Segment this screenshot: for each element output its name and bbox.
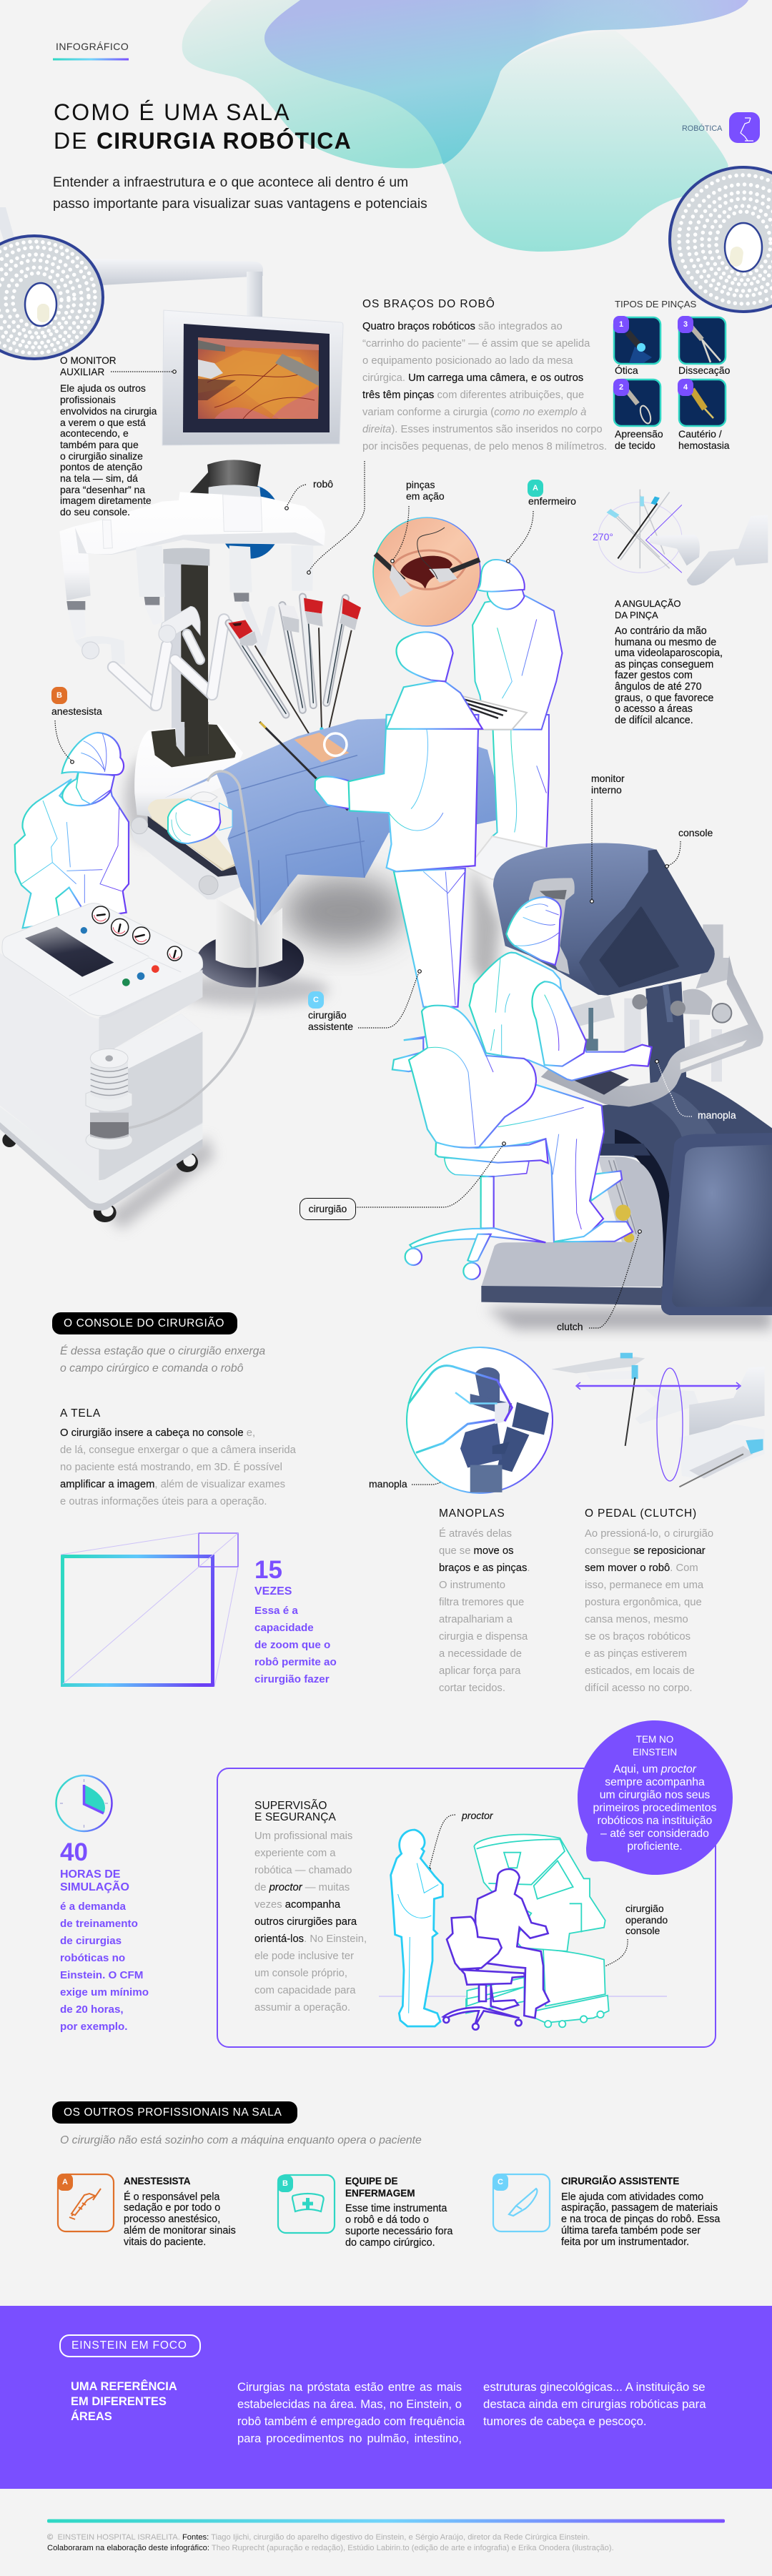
body: pedal: isso, permanece em uma [585, 1580, 703, 1591]
section pill: console [52, 1312, 237, 1334]
label: assistant surgeon: cirurgião [308, 1009, 347, 1021]
body: pedal: sem mover o robô. Com [585, 1562, 698, 1574]
card text: nursing team: do campo cirúrgico. [345, 2237, 435, 2249]
body: monitor: profissionais [60, 394, 116, 405]
body: angulation [615, 625, 723, 726]
body: screen: amplificar a imagem, além de visualizar exames [60, 1479, 285, 1490]
label: nurse: enfermeiro [528, 495, 576, 507]
label: pincers in action: pinças [406, 479, 435, 490]
badge 4: 4 [683, 383, 688, 392]
body: robot arms: o equipamento posicionado ao lado da mesa [362, 355, 573, 367]
body: supervision: outros cirurgiões para [254, 1916, 357, 1928]
body: handles: a necessidade de [439, 1648, 522, 1660]
label: proctor: proctor [462, 1810, 493, 1821]
badge 2: 2 [619, 383, 623, 392]
robot patient cart [59, 460, 361, 759]
body: monitor: envolvidos na cirurgia [60, 405, 157, 417]
assistant surgeon figure [315, 632, 482, 1071]
callout bubble [578, 1720, 733, 1875]
label: operating surgeon: cirurgião [625, 1903, 664, 1914]
unit: SIMULAÇÃO [60, 1881, 129, 1893]
card text: nursing team [345, 2176, 453, 2249]
pedal and arm movement illustration [551, 1353, 765, 1487]
heading: pincer types: TIPOS DE PINÇAS [615, 299, 696, 309]
heading: angulation: A ANGULAÇÃO [615, 598, 681, 609]
subtitle: Entender a infraestrutura e o que acontece ali dentro é um [53, 175, 408, 190]
heading: monitor: O MONITOR [60, 355, 117, 366]
body: screen: O cirurgião insere a cabeça no console e, [60, 1427, 255, 1439]
callout body: sempre acompanha [605, 1776, 705, 1788]
label: operating surgeon: operando [625, 1914, 668, 1926]
focus heading: UMA REFERÊNCIA [71, 2380, 177, 2393]
instrument tiles [614, 317, 726, 426]
badge: card B [277, 2175, 293, 2192]
purple footer band [0, 2306, 772, 2489]
body: angulation: ângulos de até 270 [615, 681, 702, 693]
badge A [528, 480, 543, 497]
badge 1: 1 [619, 320, 623, 329]
card text: assistant surgeon [561, 2175, 721, 2248]
body: pedal: postura ergonômica, que [585, 1597, 702, 1608]
body: robot arms: três têm pinças com diferentes atribuições, que [362, 390, 584, 401]
card text: anesthetist: além de monitorar sinais [124, 2225, 236, 2236]
seated surgeon figure [405, 897, 652, 1279]
stat text: de zoom que o [254, 1639, 330, 1651]
focus text column 1: estabelecidas na área. Mas, no Einstein, o [237, 2397, 462, 2411]
subtitle: passo importante para visualizar suas vantagens e potenciais [53, 197, 427, 212]
stat text: é a demanda [60, 1901, 126, 1913]
clock icon [56, 1775, 112, 1831]
zoom frame [61, 1533, 238, 1687]
body: handles [439, 1527, 530, 1694]
card heading: ANESTESISTA [124, 2176, 191, 2186]
pincer label 4 [678, 428, 730, 451]
body: supervision: experiente com a [254, 1848, 336, 1859]
focus heading [71, 2379, 177, 2423]
label: robot: robô [313, 478, 333, 490]
body: monitor: acontecendo, e [60, 427, 129, 439]
footer bar [47, 2519, 725, 2523]
body: handles: É através delas [439, 1528, 512, 1540]
supervision line art [391, 1830, 609, 2030]
callout body: um cirurgião nos seus [600, 1789, 710, 1801]
body: handles: aplicar força para [439, 1665, 520, 1677]
card text: anesthetist: processo anestésico, [124, 2214, 220, 2225]
section pill: console: O CONSOLE DO CIRURGIÃO [64, 1317, 224, 1329]
body: monitor: pontos de atenção [60, 461, 142, 472]
heading: angulation [615, 598, 681, 620]
background blobs [182, 0, 748, 252]
badge: card A [57, 2174, 73, 2191]
heading: screen: A TELA [60, 1407, 101, 1420]
angulation illustration [598, 490, 768, 585]
card heading: CIRURGIÃO ASSISTENTE [561, 2176, 679, 2186]
body: monitor: a verem o que está [60, 417, 146, 428]
body: supervision: com capacidade para [254, 1985, 355, 1996]
body: robot arms [362, 321, 607, 452]
callout body [593, 1763, 716, 1853]
heading: angulation: DA PINÇA [615, 610, 658, 620]
label: pincers in action [406, 479, 445, 502]
pincer label 2: de tecido [615, 440, 655, 451]
body: pedal: consegue se reposicionar [585, 1545, 706, 1557]
body: robot arms: Quatro braços robóticos são integrados ao [362, 321, 563, 332]
badge B: B [56, 691, 62, 700]
body: monitor: para “desenhar” na [60, 484, 145, 495]
callout body: proficiente. [627, 1841, 683, 1853]
stat text: de treinamento [60, 1918, 138, 1930]
pincer label 4: Cautério / [678, 428, 722, 440]
focus pill outline [60, 2335, 200, 2357]
anesthesia machine [0, 903, 203, 1222]
focus heading: EM DIFERENTES [71, 2395, 167, 2408]
label: console: console [678, 827, 713, 838]
focus text column 2 [483, 2380, 706, 2428]
stat: 15 times [254, 1556, 337, 1685]
focus heading: ÁREAS [71, 2410, 112, 2423]
label: operating surgeon: console [625, 1925, 660, 1936]
credits [47, 2533, 614, 2552]
card heading: ENFERMAGEM [345, 2188, 415, 2199]
subtitle [53, 175, 427, 212]
callout body: primeiros procedimentos [593, 1802, 716, 1814]
card text: assistant surgeon: aspiração, passagem de materiais [561, 2202, 718, 2214]
callout title: TEM NO [636, 1734, 673, 1745]
section pill: other professionals [52, 2101, 297, 2124]
body: screen [60, 1427, 296, 1507]
floor shadows [107, 758, 772, 1329]
intro: console: o campo cirúrgico e comanda o robô [60, 1362, 243, 1374]
section pill: other professionals: OS OUTROS PROFISSIONAIS NA SALA [64, 2106, 282, 2119]
stat text: capacidade [254, 1622, 314, 1634]
title: COMO É UMA SALA [54, 99, 291, 125]
leader end rings [71, 370, 668, 1985]
badge C: C [313, 996, 319, 1004]
focus text column 1 [237, 2380, 465, 2445]
stat text: de 20 horas, [60, 2003, 124, 2016]
stat text: de cirurgias [60, 1935, 122, 1947]
body: pedal: difícil acesso no corpo. [585, 1683, 693, 1694]
card heading: EQUIPE DE [345, 2176, 398, 2186]
header tag: INFOGRÁFICO [56, 41, 129, 52]
body: handles: filtra tremores que [439, 1597, 524, 1608]
label: handle: manopla [698, 1109, 736, 1121]
surgeon console [481, 843, 772, 1315]
label: clutch: clutch [557, 1321, 583, 1332]
label: operating surgeon [625, 1903, 668, 1936]
label: assistant surgeon: assistente [308, 1021, 353, 1032]
number 40: 40 [60, 1838, 88, 1866]
callout title: EINSTEIN [633, 1747, 677, 1758]
body: pedal: esticados, em locais de [585, 1665, 695, 1677]
pincer label 4: hemostasia [678, 440, 730, 451]
body: monitor: na tela — sim, dá [60, 472, 138, 484]
body: angulation: de difícil alcance. [615, 715, 693, 726]
focus text column 2: tumores de cabeça e pescoço. [483, 2414, 647, 2428]
supervision panel frame [217, 1768, 716, 2047]
leader lines [55, 372, 692, 1982]
badge 3 [678, 316, 693, 333]
header underline [53, 59, 129, 60]
pincer label 2: Apreensão [615, 428, 663, 440]
body: pedal: e as pinças estiverem [585, 1648, 687, 1660]
manopla circle [407, 1347, 553, 1493]
intro: other professionals: O cirurgião não está sozinho com a máquina enquanto opera o paciente [60, 2134, 422, 2146]
label: 270 degrees: 270° [593, 531, 613, 543]
body: handles: atrapalhariam a [439, 1614, 513, 1625]
badge: card B: B [282, 2179, 288, 2188]
body: screen: de lá, consegue enxergar o que a câmera inserida [60, 1445, 296, 1456]
card text: nursing team: o robô e dá todo o [345, 2214, 429, 2226]
nurse figure [460, 560, 562, 879]
card text: nursing team: Esse time instrumenta [345, 2203, 447, 2214]
card text: nursing team: suporte necessário fora [345, 2226, 452, 2237]
body: angulation: o acesso a áreas [615, 703, 693, 715]
body: handles: que se move os [439, 1545, 513, 1557]
stat text [254, 1605, 337, 1685]
card text: assistant surgeon: Ele ajuda com atividades como [561, 2191, 703, 2203]
title [54, 99, 352, 154]
body: robot arms: cirúrgica. Um carrega uma câmera, e os outros [362, 372, 583, 384]
credits: © EINSTEIN HOSPITAL ISRAELITA. Fontes: Tiago Ijichi, cirurgião do aparelho digestivo do Einstein, e Sérgio Araújo, diretor da Rede Cirúrgica Einstein. [47, 2533, 590, 2542]
label pill: surgeon: cirurgião [309, 1203, 347, 1214]
stat text: exige um mínimo [60, 1986, 149, 1998]
body: supervision: ele pode inclusive ter [254, 1951, 354, 1962]
body: supervision: de proctor — muitas [254, 1882, 350, 1893]
badge 2 [613, 379, 629, 396]
body: pedal: se os braços robóticos [585, 1631, 691, 1643]
stat text: robô permite ao [254, 1656, 337, 1668]
focus pill label: EINSTEIN EM FOCO [71, 2339, 187, 2352]
callout text [593, 1734, 716, 1853]
card text: assistant surgeon: e na troca de pinças do robô. Essa [561, 2214, 720, 2225]
body: screen: no paciente está mostrando, em 3D. É possível [60, 1462, 282, 1473]
robotics label: ROBÓTICA [682, 124, 722, 133]
body: angulation: uma videolaparoscopia, [615, 648, 723, 659]
badge: card A: A [62, 2178, 68, 2186]
label: anesthetist: anestesista [51, 705, 102, 717]
badge: card C: C [498, 2178, 503, 2186]
body: handles: O instrumento [439, 1580, 505, 1591]
heading: handles: MANOPLAS [439, 1507, 505, 1520]
card text: anesthetist: É o responsável pela [124, 2191, 219, 2203]
callout title [633, 1734, 677, 1758]
body: robot arms: variam conforme a cirurgia (como no exemplo à [362, 407, 586, 418]
surgical lamp left with arm [0, 207, 263, 359]
body: supervision: Um profissional mais [254, 1831, 352, 1842]
body: monitor: também para que [60, 439, 139, 450]
body: robot arms: direita). Esses instrumentos são inseridos no corpo [362, 424, 603, 435]
body: angulation: as pinças conseguem [615, 659, 713, 670]
floor line [379, 1996, 667, 1997]
number 15: 15 [254, 1556, 282, 1584]
body: supervision: vezes acompanha [254, 1899, 340, 1911]
badge 4 [678, 379, 693, 396]
heading: monitor: AUXILIAR [60, 367, 104, 377]
body: angulation: humana ou mesmo de [615, 637, 716, 648]
card icons [58, 2174, 550, 2233]
anesthetist figure [15, 733, 129, 931]
card text: assistant surgeon: feita por um instrumentador. [561, 2236, 689, 2248]
title: DE CIRURGIA ROBÓTICA [54, 128, 352, 154]
unit [60, 1868, 129, 1893]
heading: supervision: E SEGURANÇA [254, 1811, 336, 1823]
body: handles: braços e as pinças. [439, 1562, 530, 1574]
badge: card C [493, 2174, 508, 2191]
badge A: A [533, 484, 538, 492]
focus text column 2: destaca ainda em cirurgias robóticas para [483, 2397, 706, 2411]
body: monitor [60, 382, 157, 517]
surgical lamp right [670, 167, 772, 312]
label pill: surgeon [300, 1198, 356, 1220]
label: handle detail: manopla [369, 1478, 407, 1490]
focus text column 1: Cirurgias na próstata estão entre as mais [237, 2380, 462, 2394]
credits: Colaboraram na elaboração deste infográfico: Theo Ruprecht (apuração e redação), Estúdio Labirin.to (edição de arte e infografia) e Erika Onodera (ilustração). [47, 2544, 614, 2552]
unit: VEZES [254, 1585, 292, 1597]
body: pedal [585, 1528, 713, 1694]
unit: HORAS DE [60, 1868, 120, 1881]
body: monitor: o cirurgião sinalize [60, 450, 143, 462]
pincers in action circle [373, 517, 480, 626]
body: handles: cortar tecidos. [439, 1683, 505, 1694]
body: monitor: do seu console. [60, 506, 130, 517]
robotics icon [729, 112, 760, 143]
pincer label 2 [615, 428, 663, 451]
label: pincers in action: em ação [406, 490, 445, 502]
body: monitor: Ele ajuda os outros [60, 382, 146, 394]
card text: anesthetist: sedação e por todo o [124, 2202, 220, 2214]
pincer label 3: Dissecação [678, 365, 730, 376]
body: robot arms: por incisões pequenas, de pelo menos 8 milímetros. [362, 441, 607, 452]
callout body: Aqui, um proctor [613, 1763, 696, 1775]
stat text [60, 1901, 149, 2033]
body: monitor: imagem diretamente [60, 495, 152, 506]
card text: anesthetist: vitais do paciente. [124, 2236, 206, 2248]
badge C [308, 991, 324, 1009]
body: angulation: Ao contrário da mão [615, 625, 707, 637]
body: robot arms: “carrinho do paciente” — é assim que se apelida [362, 338, 590, 350]
pincer label 1: Ótica [615, 365, 638, 376]
body: handles: cirurgia e dispensa [439, 1631, 528, 1643]
intro: console: É dessa estação que o cirurgião enxerga [60, 1345, 265, 1357]
body: supervision: um console próprio, [254, 1968, 347, 1979]
heading: supervision [254, 1799, 336, 1823]
stat text: robóticas no [60, 1952, 125, 1964]
card heading [345, 2176, 415, 2199]
body: pedal: Ao pressioná-lo, o cirurgião [585, 1528, 713, 1540]
heading: supervision: SUPERVISÃO [254, 1800, 327, 1812]
label: internal monitor: interno [591, 784, 622, 796]
operating table and draped patient [130, 718, 505, 988]
intro: console [60, 1344, 265, 1374]
card text: assistant surgeon: última tarefa também pode ser [561, 2225, 701, 2236]
label: internal monitor: monitor [591, 773, 625, 784]
badge 3: 3 [683, 320, 688, 329]
body: supervision: assumir a operação. [254, 2002, 350, 2013]
body: supervision [254, 1831, 367, 2013]
cable [129, 771, 257, 1128]
label: internal monitor [591, 773, 625, 796]
body: supervision: robótica — chamado [254, 1865, 352, 1876]
stat text: Einstein. O CFM [60, 1969, 143, 1981]
callout body: – até ser considerado [600, 1828, 709, 1840]
heading: pedal: O PEDAL (CLUTCH) [585, 1507, 697, 1520]
body: pedal: cansa menos, mesmo [585, 1614, 688, 1625]
focus text column 2: estruturas ginecológicas... A instituição se [483, 2380, 706, 2394]
auxiliary monitor [162, 310, 343, 445]
stat text: Essa é a [254, 1605, 298, 1617]
body: supervision: orientá-los. No Einstein, [254, 1933, 367, 1945]
stat text: por exemplo. [60, 2021, 128, 2033]
badge B [51, 687, 67, 704]
body: screen: e outras informações úteis para a operação. [60, 1496, 267, 1507]
label: assistant surgeon [308, 1009, 353, 1032]
stat: 40 hours [60, 1838, 149, 2033]
body: angulation: fazer gestos com [615, 670, 693, 681]
focus text column 1: robô também é empregado com frequência [237, 2414, 465, 2428]
heading: monitor [60, 355, 117, 377]
body: angulation: graus, o que favorece [615, 693, 713, 704]
text: auxiliary monitor [60, 355, 157, 517]
focus text column 1: para procedimentos no pulmão, intestino, [237, 2432, 462, 2445]
stat text: cirurgião fazer [254, 1673, 330, 1685]
badge 1 [613, 316, 629, 333]
callout body: robóticos na instituição [598, 1815, 712, 1827]
card text: anesthetist [124, 2176, 236, 2248]
heading: robot arms: OS BRAÇOS DO ROBÔ [362, 298, 495, 310]
